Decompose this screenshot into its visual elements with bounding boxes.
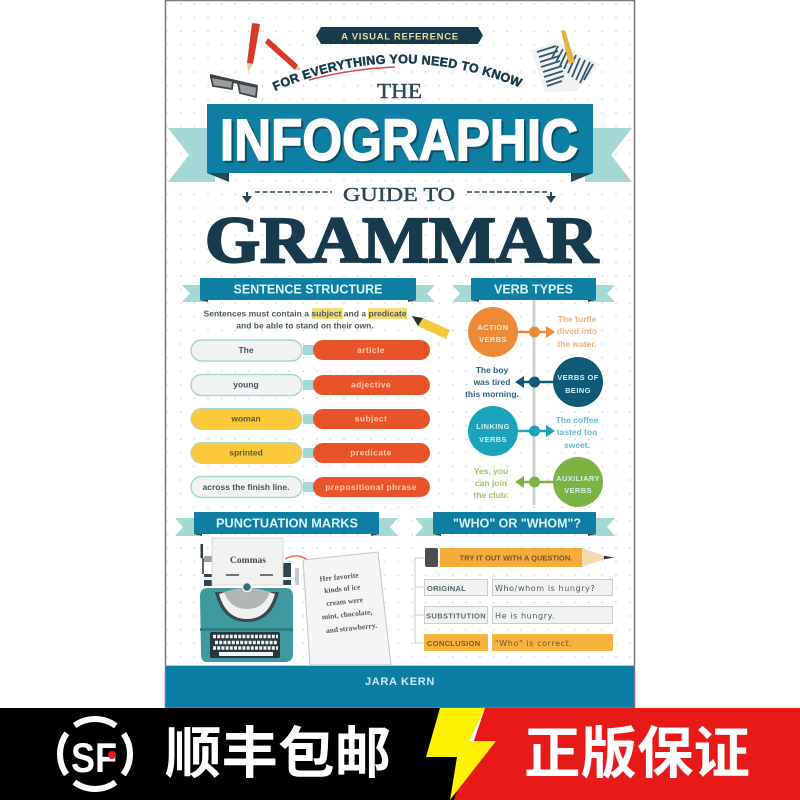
promo strip: shipping: 顺丰包邮 (165, 709, 391, 790)
verbs of being (465, 357, 603, 407)
row: substitution (424, 606, 612, 624)
subtitle: guide to with arrows: GUIDE TO (343, 184, 455, 206)
linking verbs: VERBS (479, 435, 507, 444)
auxiliary verbs: VERBS (564, 486, 592, 495)
heading: sentence structure (182, 278, 435, 302)
icon: typewriter: Commas (230, 556, 266, 566)
book cover background (166, 0, 634, 708)
action verbs: the water. (557, 339, 597, 349)
auxiliary verbs: AUXILIARY (556, 474, 600, 483)
icon: paper with lines and pencil (531, 30, 600, 92)
heading: punctuation marks (175, 512, 398, 536)
icon: SF logo (60, 719, 130, 789)
icon: SF logo: SF (71, 734, 117, 781)
note paper: comma example: cream were (326, 595, 364, 608)
row: woman / subject: subject (355, 414, 387, 424)
row: young / adjective: adjective (351, 380, 391, 390)
row: substitution: SUBSTITUTION (426, 612, 486, 620)
row: the / article: article (357, 345, 385, 355)
linking verbs: sweet. (564, 440, 590, 450)
auxiliary verbs: the club. (474, 490, 508, 500)
title: the: THE (377, 79, 422, 103)
icon: yellow highlighter (412, 316, 450, 339)
heading: sentence structure: SENTENCE STRUCTURE (234, 282, 383, 296)
linking verbs (468, 406, 599, 456)
row: conclusion: CONCLUSION (427, 639, 480, 648)
auxiliary verbs (474, 457, 603, 507)
heading: who or whom: "WHO" OR "WHOM"? (453, 516, 581, 530)
row: woman / subject: woman (230, 414, 261, 424)
row: original (424, 580, 612, 596)
action verbs (468, 307, 597, 357)
action verbs: The turtle (558, 314, 597, 324)
bracket connector (415, 558, 425, 643)
panel: sentence structure (182, 278, 450, 498)
subtitle: guide to with arrows (242, 184, 556, 206)
tagline: for everything you need to know: FOR EVERYTHING YOU NEED TO KNOW (272, 54, 524, 91)
row: woman / subject (191, 408, 430, 430)
row: the / article (191, 340, 430, 361)
heading: verb types (452, 278, 615, 302)
note paper: comma example (303, 552, 391, 665)
icon: pencil with try it out label (425, 548, 614, 567)
row: substitution: He is hungry. (495, 612, 555, 620)
heading: verb types: VERB TYPES (494, 282, 573, 296)
verbs of being: was tired (473, 377, 510, 387)
intro text with highlights (204, 308, 407, 330)
icon: lightning bolt (426, 708, 496, 800)
badge: a visual reference: A VISUAL REFERENCE (341, 32, 459, 42)
row: young / adjective: young (233, 380, 259, 390)
panel: punctuation marks (175, 512, 398, 665)
title: grammar: GRAMMAR (205, 204, 599, 277)
row: original: Who/whom is hungry? (495, 584, 595, 593)
panel: who or whom (415, 512, 615, 651)
note paper: comma example: kinds of ice (324, 582, 361, 595)
intro text with highlights: Sentences must contain a subject and a predicate (204, 308, 407, 318)
row: conclusion: "Who" is correct. (495, 639, 572, 648)
title banner: infographic: INFOGRAPHIC (220, 108, 578, 173)
icon: typewriter (200, 538, 299, 662)
verbs of being: The boy (476, 365, 509, 375)
row: across the finish line / prepositional phrase (191, 476, 430, 498)
row: young / adjective (191, 374, 430, 396)
note paper: comma example: mint, chocolate, (321, 607, 373, 621)
linking verbs: The coffee (556, 415, 599, 425)
note paper: comma example: and strawberry. (325, 621, 378, 635)
row: sprinted / predicate (191, 442, 430, 464)
auxiliary verbs: can join (475, 478, 507, 488)
footer: author band: JARA KERN (365, 676, 435, 688)
note paper: comma example: Her favorite (319, 570, 360, 583)
verbs of being: BEING (565, 386, 591, 395)
arrow: red curved (285, 556, 315, 569)
timeline spine (532, 300, 536, 505)
icon: red pencil diagonal (265, 38, 301, 70)
linking verbs: LINKING (476, 422, 510, 431)
heading: punctuation marks: PUNCTUATION MARKS (216, 516, 358, 530)
row: sprinted / predicate: sprinted (229, 448, 263, 458)
icon: pencil with try it out label: TRY IT OUT WITH A QUESTION. (460, 554, 572, 562)
promo strip: genuine guarantee (454, 708, 800, 800)
action verbs: ACTION (477, 323, 509, 332)
panel: verb types (452, 278, 615, 507)
icon: red pencil upright (247, 23, 260, 72)
row: across the finish line / prepositional phrase: prepositional phrase (325, 482, 417, 492)
auxiliary verbs: Yes, you (474, 466, 508, 476)
title banner: infographic: INFOGRAPHIC (222, 110, 580, 175)
promo strip: genuine guarantee: 正版保证 (524, 709, 750, 790)
heading: who or whom (415, 512, 615, 536)
badge: a visual reference (316, 27, 483, 44)
linking verbs: tasted too (557, 427, 597, 437)
row: the / article: The (238, 345, 254, 355)
row: conclusion (424, 634, 613, 651)
row: sprinted / predicate: predicate (350, 448, 392, 458)
promo strip: shipping (0, 708, 460, 800)
action verbs: VERBS (479, 335, 507, 344)
verbs of being: VERBS OF (557, 373, 599, 382)
icon: glasses (210, 74, 258, 97)
action verbs: dived into (557, 326, 597, 336)
row: original: ORIGINAL (427, 584, 466, 593)
footer: author band (166, 665, 634, 707)
intro text with highlights: and be able to stand on their own. (236, 320, 374, 330)
row: across the finish line / prepositional phrase: across the finish line. (203, 482, 289, 492)
verbs of being: this morning. (465, 389, 519, 399)
